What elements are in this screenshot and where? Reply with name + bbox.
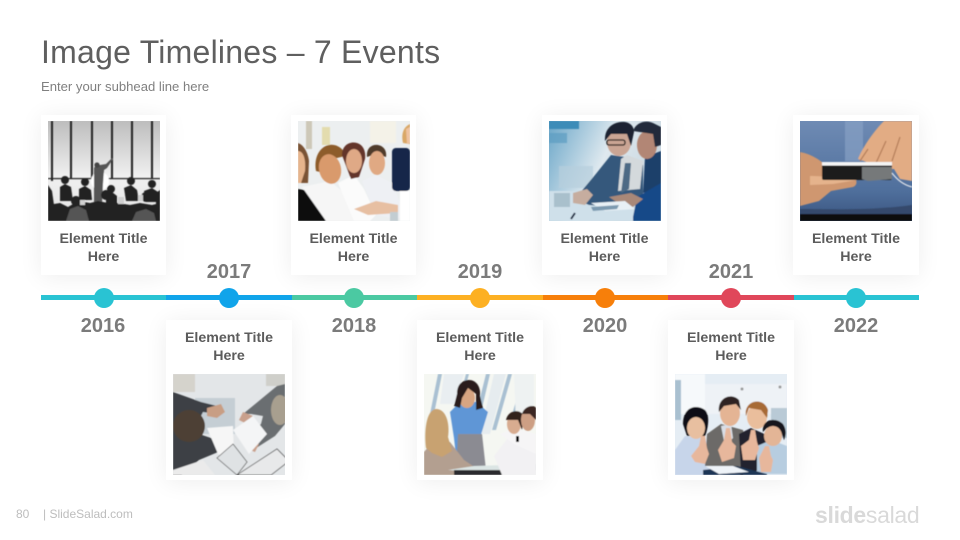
photo: two businessmen reviewing a tablet [549, 121, 661, 221]
element title: Element Title [309, 231, 398, 247]
photo: hands holding a smartphone [800, 121, 912, 221]
photo: woman presenting at a meeting table [424, 374, 536, 475]
card: 2020 event [542, 115, 667, 275]
element title: Here [840, 249, 872, 265]
photo: silhouetted audience and presenter [48, 121, 160, 221]
year label: 2021: 2021 [709, 261, 753, 283]
element title [436, 330, 524, 364]
element title [812, 231, 900, 265]
footer site name: | SlideSalad.com [43, 507, 133, 521]
element title: Here [88, 249, 119, 265]
photo: four colleagues giving thumbs up [675, 374, 787, 475]
element title: Here [715, 348, 747, 364]
card: 2017 event [166, 320, 292, 480]
year label: 2019: 2019 [458, 261, 502, 283]
card: 2021 event [668, 320, 794, 480]
segment and marker: 2016 [41, 288, 166, 308]
photo: overhead view of men signing documents [173, 374, 285, 475]
element title: Here [213, 348, 245, 364]
year label: 2017: 2017 [207, 261, 251, 283]
subhead: Enter your subhead line here [41, 79, 209, 94]
element title: Here [589, 249, 620, 265]
page number: 80 [16, 507, 29, 521]
year label: 2018: 2018 [332, 315, 376, 337]
year label: 2022: 2022 [834, 315, 878, 337]
card: 2019 event [417, 320, 543, 480]
element title: Element Title [185, 330, 273, 346]
year label: 2020: 2020 [583, 315, 627, 337]
segment and marker: 2021 [668, 288, 794, 308]
element title: Element Title [812, 231, 900, 247]
element title: Element Title [560, 231, 649, 247]
title: Image Timelines – 7 Events [41, 34, 440, 70]
element title [560, 231, 649, 265]
element title: Element Title [687, 330, 775, 346]
element title: Here [464, 348, 496, 364]
card: 2016 event [41, 115, 166, 275]
photo: smiling team seated in a row [298, 121, 410, 221]
card: 2018 event [291, 115, 416, 275]
element title [185, 330, 273, 364]
year label: 2016: 2016 [81, 315, 125, 337]
element title: Element Title [59, 231, 148, 247]
element title [59, 231, 148, 265]
element title [309, 231, 398, 265]
segment and marker: 2018 [292, 288, 417, 308]
element title [687, 330, 775, 364]
segment and marker: 2020 [543, 288, 668, 308]
element title: Here [338, 249, 369, 265]
segment and marker: 2017 [166, 288, 292, 308]
logo: slidesalad wordmark: slidesalad [815, 502, 919, 528]
timeline: coloured line with year markers [41, 288, 919, 308]
segment and marker: 2022 [794, 288, 919, 308]
card: 2022 event [793, 115, 919, 275]
segment and marker: 2019 [417, 288, 543, 308]
element title: Element Title [436, 330, 524, 346]
